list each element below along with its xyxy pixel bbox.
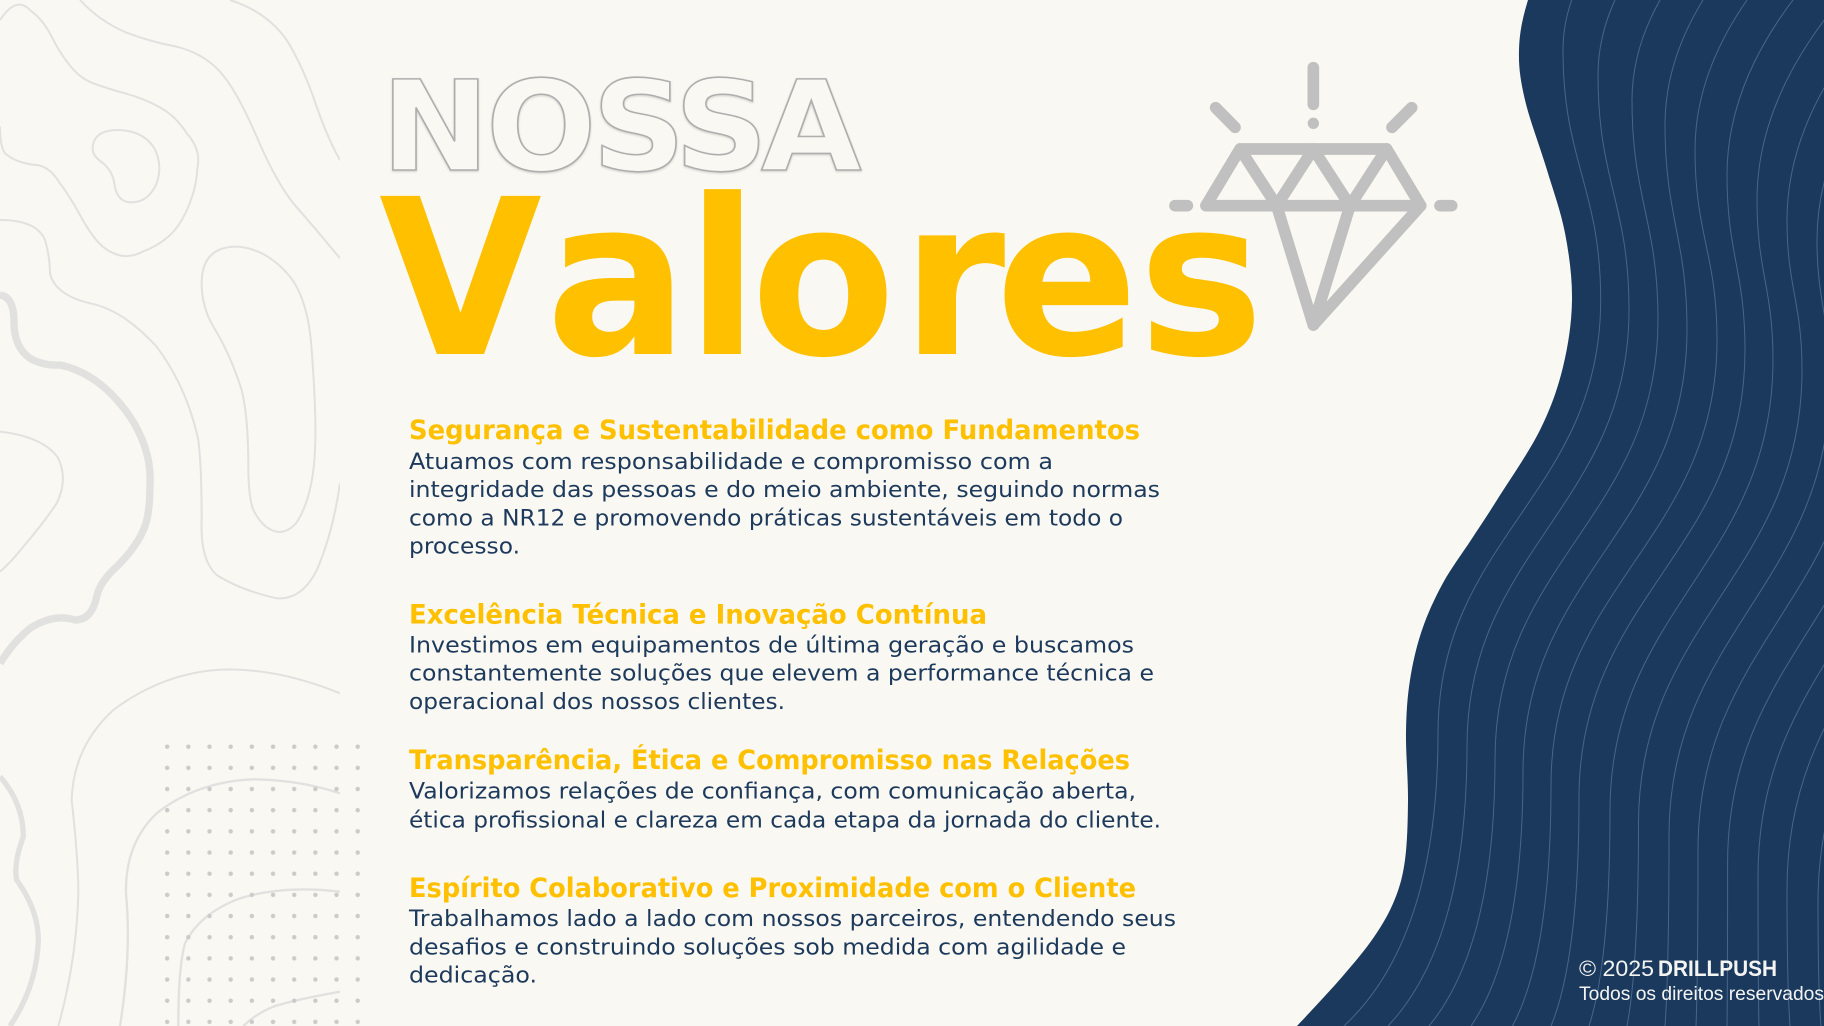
heading: Segurança e Sustentabilidade como Fundamentos xyxy=(409,415,1140,446)
body text xyxy=(409,634,1154,715)
value: excelência xyxy=(409,600,1154,715)
heading: Transparência, Ética e Compromisso nas Relações xyxy=(409,744,1130,776)
value: segurança xyxy=(409,415,1160,560)
body text: como a NR12 e promovendo práticas sustentáveis em todo o xyxy=(409,506,1123,532)
body text: Atuamos com responsabilidade e compromisso com a xyxy=(409,450,1053,475)
value: transparência xyxy=(409,744,1161,834)
body text xyxy=(409,450,1160,560)
body text xyxy=(409,780,1161,834)
body text: Investimos em equipamentos de última geração e buscamos xyxy=(409,634,1134,658)
body text: Trabalhamos lado a lado com nossos parceiros, entendendo seus xyxy=(408,907,1176,932)
body text: desafios e construindo soluções sob medida com agilidade e xyxy=(409,936,1126,960)
body text: processo. xyxy=(409,534,520,560)
heading: Excelência Técnica e Inovação Contínua xyxy=(409,600,987,630)
body text: integridade das pessoas e do meio ambiente, seguindo normas xyxy=(409,478,1160,503)
footer copyright: DRILLPUSH xyxy=(1658,956,1777,981)
title: Valores: Valores xyxy=(379,154,1264,406)
topographic contour lines xyxy=(0,0,340,1026)
body text: constantemente soluções que elevem a performance técnica e xyxy=(409,662,1154,686)
heading: Espírito Colaborativo e Proximidade com o Cliente xyxy=(409,873,1136,904)
title: NOSSA outline: NOSSA xyxy=(381,55,862,200)
navy wave panel xyxy=(1297,0,1824,1026)
icon: diamond xyxy=(1175,68,1452,325)
footer copyright: Todos os direitos reservados xyxy=(1579,983,1824,1005)
footer copyright: © 2025 xyxy=(1579,956,1654,981)
body text xyxy=(408,907,1176,988)
footer copyright xyxy=(1579,956,1824,1005)
body text: ética profissional e clareza em cada etapa da jornada do cliente. xyxy=(409,808,1161,834)
body text: operacional dos nossos clientes. xyxy=(409,690,785,715)
dot grid xyxy=(157,736,368,1026)
body text: dedicação. xyxy=(409,964,537,988)
panel: values list xyxy=(408,415,1176,988)
value: espírito xyxy=(408,873,1176,988)
body text: Valorizamos relações de confiança, com comunicação aberta, xyxy=(409,780,1136,804)
